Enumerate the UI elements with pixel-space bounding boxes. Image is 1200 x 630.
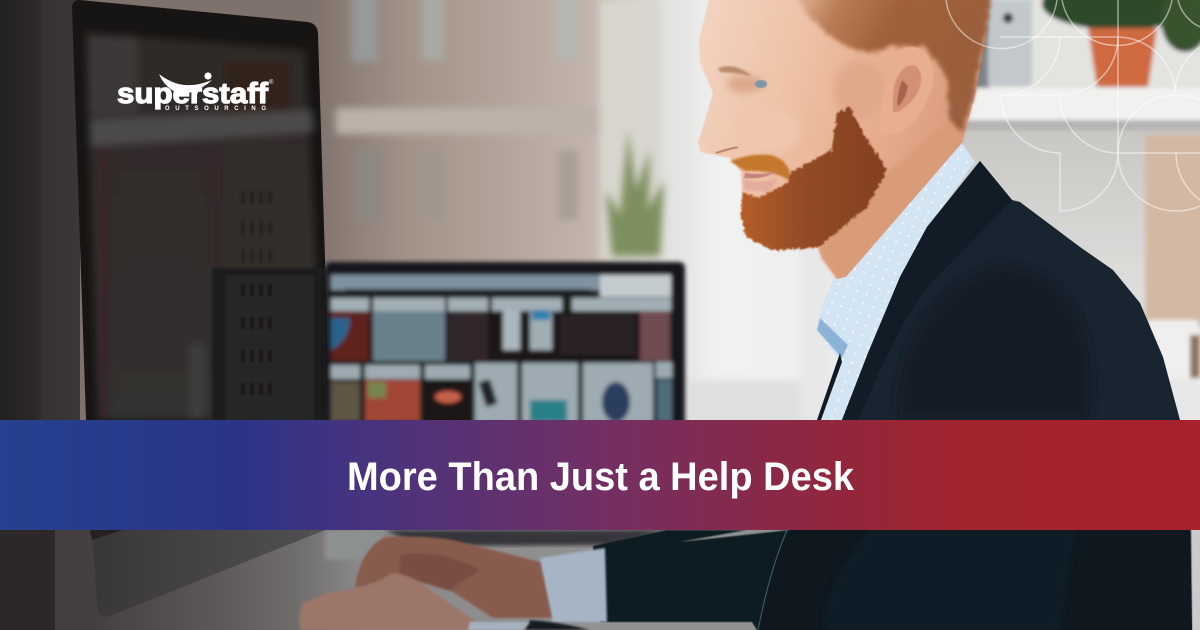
hands on keyboard: [300, 536, 590, 630]
jacket sleeve and body below banner: [593, 530, 1192, 630]
eye, brow and mouth: [716, 66, 779, 192]
beard and moustache: [730, 107, 887, 250]
lower monitor panel: [92, 530, 325, 617]
shirt collar: [817, 143, 975, 420]
man in profile: [698, 0, 1180, 420]
jacket: [817, 161, 1180, 420]
computer monitor at left: [0, 0, 330, 420]
blurred potted plant: [606, 130, 664, 256]
ear: [880, 47, 934, 135]
hair: [795, 0, 992, 132]
neck shading: [820, 110, 962, 280]
company logo: ®: [269, 79, 274, 86]
neck and face: [698, 0, 990, 280]
logo swoosh: [159, 74, 212, 94]
title banner: [0, 420, 1200, 530]
screen reflection of laptop: [212, 192, 326, 420]
shelf with pot and wall decor: [950, 0, 1200, 423]
shirt cuff: [540, 548, 607, 622]
decorative geometric line pattern: [946, 0, 1200, 211]
company logo: OUTSOURCING: [165, 106, 266, 112]
company logo: superstaff: [117, 78, 268, 110]
title: More Than Just a Help Desk: [347, 455, 855, 499]
lower desk area: [0, 530, 1200, 630]
blurred office background: [0, 0, 1200, 430]
keyboard: [385, 530, 670, 546]
laptop with blurred web shop screen: [325, 262, 685, 432]
cheek and eye socket shading: [727, 60, 886, 152]
